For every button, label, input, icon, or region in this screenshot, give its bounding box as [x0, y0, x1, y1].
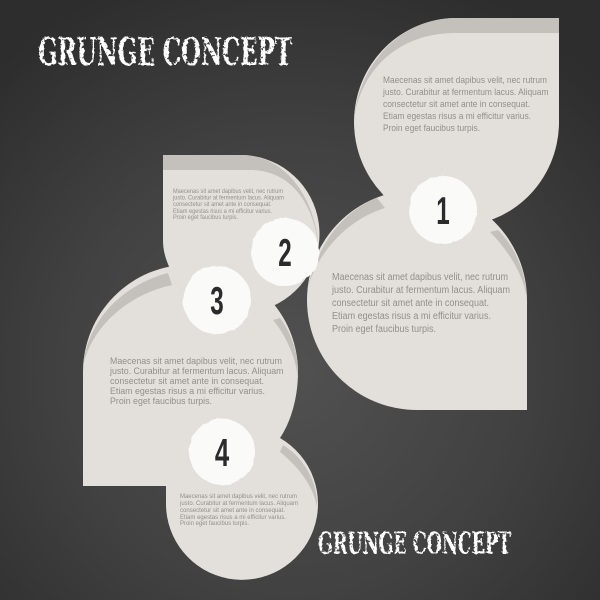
- number badge 3: [183, 266, 251, 334]
- panel 3 shape: [83, 264, 298, 486]
- panel: step 3: [83, 264, 298, 486]
- panel 4 fold shadow: [280, 445, 317, 507]
- panel 4 text: Etiam egestas risus a mi efficitur varius.: [180, 514, 286, 521]
- panel 4 text: [179, 493, 298, 527]
- panel 4 text: Maecenas sit amet dapibus velit, nec rutrum: [180, 493, 297, 500]
- panel 2 fold shadow: [163, 155, 319, 250]
- panel 1 lower text: consectetur sit amet ante in consequat.: [332, 298, 489, 309]
- title top: GRUNGE CONCEPT: [38, 29, 292, 74]
- panel 2 text: Etiam egestas risus a mi efficitur varius.: [173, 209, 272, 215]
- panel 4 text: justo. Curabitur at fermentum lacus. Aliquam: [179, 500, 298, 507]
- number badge 4: 4: [215, 432, 230, 475]
- panel 3 left fold shadow: [83, 273, 172, 366]
- panel 4 text: consectetur sit amet ante in consequat.: [180, 507, 285, 514]
- panel 3 text: Maecenas sit amet dapibus velit, nec rutrum: [110, 356, 282, 367]
- panel 1 upper text: Proin eget faucibus turpis.: [383, 123, 480, 134]
- panel 1 upper text: Etiam egestas risus a mi efficitur varius.: [383, 111, 531, 122]
- panel 3 text: [109, 356, 284, 407]
- panel 1 lower left fold shadow: [307, 198, 385, 292]
- panel 1 lower text: Maecenas sit amet dapibus velit, nec rutrum: [332, 272, 508, 283]
- panel 2 text: Proin eget faucibus turpis.: [173, 215, 238, 221]
- panel 2 text: justo. Curabitur at fermentum lacus. Aliquam: [172, 196, 284, 202]
- panel 4 text: Proin eget faucibus turpis.: [180, 520, 249, 527]
- panel: step 4: [166, 438, 318, 580]
- number badge 2: 2: [278, 231, 292, 274]
- number badge 1: 1: [436, 189, 450, 232]
- panel 1 lower shape: [307, 190, 527, 410]
- panel 1 upper text: [382, 75, 549, 134]
- panel 1 upper fold shadow: [354, 18, 559, 118]
- panel: step 1 upper: [354, 18, 559, 226]
- number badge 3: 3: [210, 279, 224, 322]
- panel 3 text: justo. Curabitur at fermentum lacus. Aliquam: [109, 366, 284, 377]
- panel 2 text: [172, 189, 284, 221]
- panel 4 shape: [166, 438, 318, 580]
- panel 1 lower text: Etiam egestas risus a mi efficitur varius.: [332, 311, 491, 322]
- panel 1 lower text: [331, 272, 510, 335]
- panel 1 lower right fold shadow: [490, 230, 527, 300]
- panel: step 2: [163, 155, 320, 306]
- number badge 2: [251, 218, 319, 286]
- number badge 4: [189, 419, 255, 485]
- panel 1 upper text: Maecenas sit amet dapibus velit, nec rutrum: [383, 75, 547, 86]
- panel 1 upper text: consectetur sit amet ante in consequat.: [383, 99, 530, 110]
- number badge 1: [409, 176, 477, 244]
- panel 3 right fold shadow: [273, 318, 298, 378]
- panel 2 text: consectetur sit amet ante in consequat.: [173, 202, 272, 208]
- panel 1 lower text: Proin eget faucibus turpis.: [332, 324, 436, 335]
- panel 1 upper shape: [354, 18, 559, 226]
- panel: step 1 lower: [307, 190, 527, 410]
- panel 2 shape: [163, 155, 320, 306]
- panel 3 text: consectetur sit amet ante in consequat.: [110, 376, 264, 387]
- panel 2 text: Maecenas sit amet dapibus velit, nec rutrum: [173, 189, 283, 195]
- panel 1 upper text: justo. Curabitur at fermentum lacus. Aliquam: [382, 87, 549, 98]
- panel 3 text: Proin eget faucibus turpis.: [110, 396, 212, 407]
- panel 3 text: Etiam egestas risus a mi efficitur varius.: [110, 386, 265, 397]
- panel 1 lower text: justo. Curabitur at fermentum lacus. Aliquam: [331, 285, 510, 296]
